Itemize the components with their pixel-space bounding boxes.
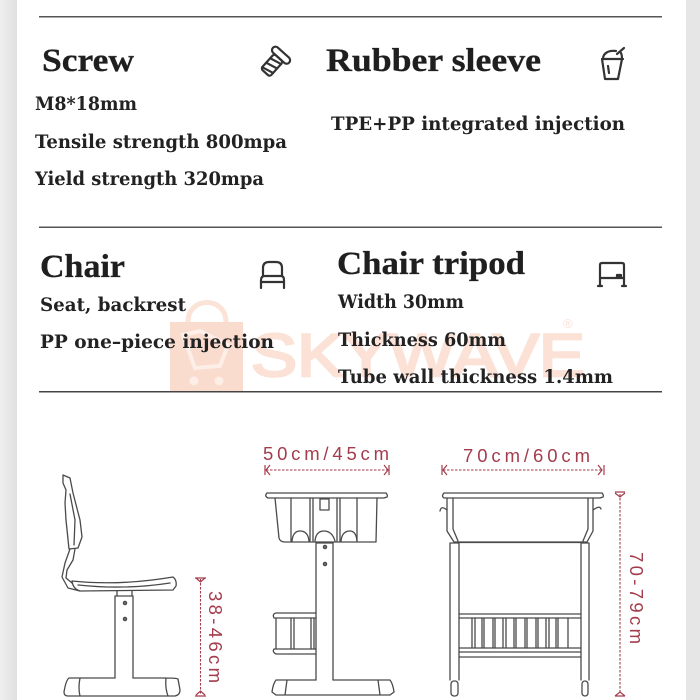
icon: screw	[257, 45, 292, 80]
panel: chair tripod	[337, 246, 626, 388]
text: screw size: M8*18mm	[35, 93, 137, 115]
icon: rubber sleeve	[602, 48, 624, 79]
panel: rubber sleeve	[326, 43, 625, 135]
panel: chair	[40, 249, 284, 353]
heading: chair tripod: Chair tripod	[337, 246, 525, 282]
text: chair process: PP one–piece injection	[40, 331, 274, 353]
text: chair parts: Seat, backrest	[40, 294, 186, 316]
heading: rubber sleeve: Rubber sleeve	[326, 43, 541, 79]
watermark: Skywave logo: ®	[563, 316, 573, 331]
diagram: desk front view	[440, 445, 647, 696]
desk side drawing	[266, 493, 394, 695]
dimension label: desk height: 70-79cm	[626, 552, 647, 644]
divider: top	[39, 16, 662, 18]
watermark: Skywave logo	[170, 302, 585, 392]
dimension arrow: desk depth	[265, 465, 389, 475]
dimension label: chair height: 38-46cm	[205, 591, 226, 683]
text: yield strength: Yield strength 320mpa	[34, 168, 264, 190]
icon: chair	[261, 262, 284, 288]
divider: middle	[39, 226, 662, 228]
dimension arrow: desk width	[442, 465, 604, 475]
heading: screw: Screw	[42, 43, 134, 79]
text: tube wall thickness: Tube wall thickness 1.4mm	[338, 366, 613, 388]
diagram: desk side view	[263, 443, 394, 695]
dimension label: desk depth: 50cm/45cm	[263, 443, 389, 464]
text: tripod width: Width 30mm	[337, 291, 464, 313]
dimension arrow: desk height	[615, 492, 625, 696]
dimension label: desk width: 70cm/60cm	[463, 445, 590, 466]
text: tensile strength: Tensile strength 800mpa	[35, 131, 287, 153]
icon: chair tripod	[598, 263, 626, 286]
panel: screw	[34, 43, 292, 190]
text: rubber sleeve material: TPE+PP integrated injection	[331, 113, 625, 135]
diagram: chair side view	[62, 475, 226, 696]
dimension arrow: chair height	[195, 578, 206, 696]
heading: chair: Chair	[40, 249, 125, 285]
text: tripod thickness: Thickness 60mm	[338, 329, 506, 351]
divider: lower	[39, 391, 662, 392]
watermark: Skywave logo: SKYWAVE	[251, 322, 585, 389]
desk front drawing	[440, 493, 603, 696]
chair drawing	[62, 475, 180, 696]
